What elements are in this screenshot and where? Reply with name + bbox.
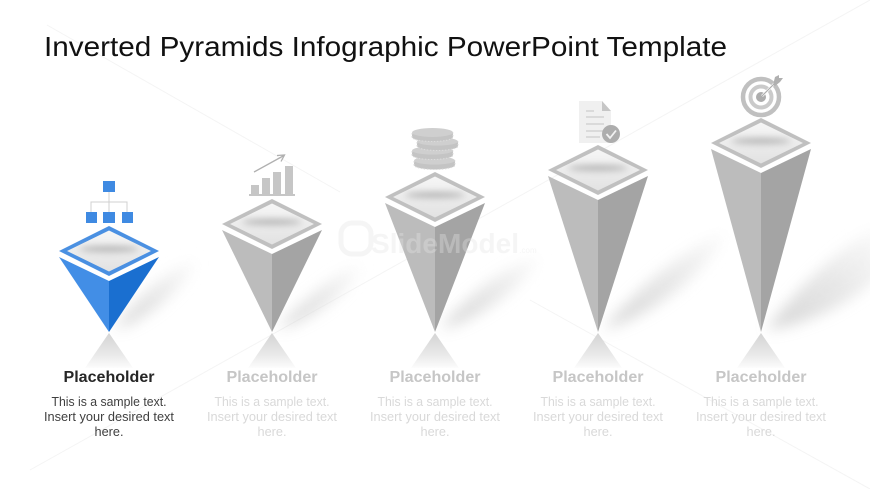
label 1 [44,369,175,439]
pyramid 1: blue active [59,226,197,368]
watermark [341,223,537,259]
icon: document with check [579,101,620,143]
cast shadow [604,232,726,329]
top diamond [385,172,485,222]
body right face [598,176,648,332]
reflection [737,333,785,368]
watermark: SlideModel [371,228,519,259]
inner diamond [556,150,640,190]
label 4: This is a sample text. [540,395,656,409]
pyramid 3 [385,172,540,368]
icon: coin stack [412,128,458,170]
icon: target with arrow [743,75,783,115]
label 1: Placeholder [64,369,154,386]
label 3: This is a sample text. [378,395,492,409]
label 3: Placeholder [390,369,480,386]
inner diamond [230,204,314,244]
cast shadow [441,256,540,329]
pyramid 4 [548,145,726,368]
label 3 [370,369,501,439]
body right face [435,203,485,332]
label 1: Insert your desired text [44,410,175,424]
title: Inverted Pyramids Infographic PowerPoint Template [44,31,727,62]
watermark: .com [519,246,537,255]
inner shade [79,246,139,252]
top diamond [222,199,322,249]
inner shade [405,192,465,198]
label 4: Insert your desired text [533,410,664,424]
label 1: here. [94,425,124,439]
label 3: here. [420,425,450,439]
label 5: here. [746,425,776,439]
top diamond [59,226,159,276]
pyramid 5 [711,118,870,368]
label 2 [207,369,338,439]
inner shade [242,219,302,225]
label 5 [696,369,827,439]
reflection [85,333,133,368]
body left face [222,230,272,332]
icon: organisation chart [86,181,133,223]
label 5: Insert your desired text [696,410,827,424]
body left face [548,176,598,332]
inner shade [568,165,628,171]
pyramid 2 [222,199,362,368]
cast shadow [278,264,362,329]
label 3: Insert your desired text [370,410,501,424]
label 2: Insert your desired text [207,410,338,424]
inner diamond [719,122,803,164]
reflection [574,333,622,368]
body left face [711,149,761,332]
label 5: This is a sample text. [704,395,818,409]
label 2: Placeholder [226,369,318,386]
reflection [248,333,296,368]
icon: bar chart with arrow [249,155,295,196]
top diamond [711,118,811,168]
body right face [761,149,811,332]
label 4: here. [584,425,612,439]
top diamond [548,145,648,195]
cast shadow [115,260,197,329]
label 2: This is a sample text. [214,395,330,409]
label 4: Placeholder [552,369,644,386]
body left face [59,257,109,332]
label 1: This is a sample text. [52,395,166,409]
label 4 [533,369,664,439]
inner diamond [393,176,477,218]
cast shadow [767,226,870,330]
body left face [385,203,435,332]
reflection [411,333,459,368]
body right face [109,257,159,332]
body right face [272,230,322,332]
inner shade [731,138,791,144]
label 5: Placeholder [716,369,806,386]
inner diamond [67,230,151,272]
label 2: here. [258,425,286,439]
